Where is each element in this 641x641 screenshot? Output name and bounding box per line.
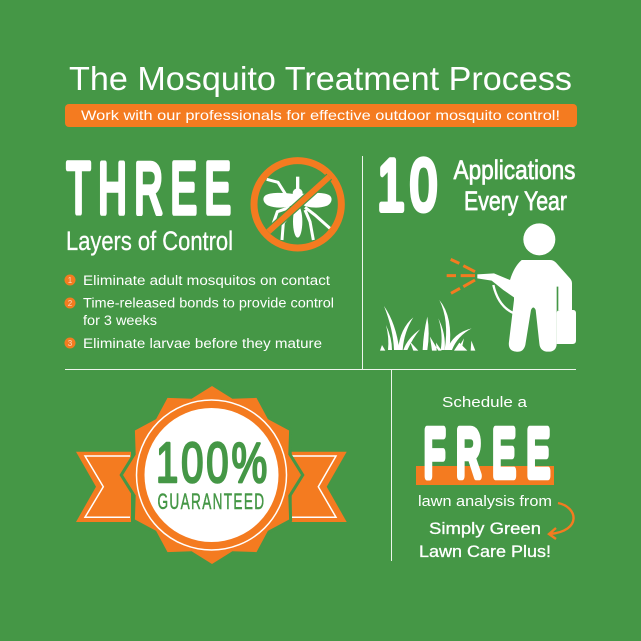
icon: person spraying lawn xyxy=(380,223,576,352)
guarantee text: 100% xyxy=(156,431,270,495)
bullet 2: 2 xyxy=(68,299,73,308)
heading: three layers of control: THREE xyxy=(66,149,238,229)
guarantee text: GUARANTEED xyxy=(158,489,264,514)
bullet 1: Eliminate adult mosquitos on contact xyxy=(83,273,330,288)
call to action: lawn analysis from xyxy=(418,493,552,510)
icon: spray xyxy=(447,259,475,293)
orange highlight bar xyxy=(416,466,554,485)
title: The Mosquito Treatment Process xyxy=(69,60,572,97)
call to action: Lawn Care Plus! xyxy=(419,543,551,561)
call to action: Schedule a xyxy=(442,394,528,411)
bullet 2 xyxy=(64,296,334,328)
bullet 3: Eliminate larvae before they mature xyxy=(83,336,322,351)
bullet 1: 1 xyxy=(68,276,73,285)
heading: 10 applications every year xyxy=(378,146,576,226)
bullet 2: for 3 weeks xyxy=(83,313,157,328)
bullet 2: Time-released bonds to provide control xyxy=(83,296,334,310)
icon: person xyxy=(477,223,576,352)
orange subtitle banner: Work with our professionals for effective outdoor mosquito control! xyxy=(81,107,560,123)
ribbon xyxy=(76,452,347,522)
icon: curved arrow xyxy=(549,503,574,539)
list: control layers xyxy=(64,273,334,351)
call to action: Simply Green xyxy=(429,520,541,538)
heading: 10 applications every year: 10 xyxy=(378,146,442,226)
icon: crossed-out mosquito xyxy=(254,161,341,248)
heading: 10 applications every year: Every Year xyxy=(464,186,567,216)
bullet 3: 3 xyxy=(68,339,73,348)
heading: 10 applications every year: Applications xyxy=(454,155,576,185)
icon: grass xyxy=(380,300,475,351)
orange subtitle banner xyxy=(65,104,577,127)
heading: three layers of control: Layers of Control xyxy=(66,226,233,256)
badge: 100% guaranteed xyxy=(76,386,347,564)
guarantee text xyxy=(156,431,270,514)
seal xyxy=(123,386,301,564)
heading: three layers of control xyxy=(66,149,238,256)
call to action xyxy=(416,394,574,561)
